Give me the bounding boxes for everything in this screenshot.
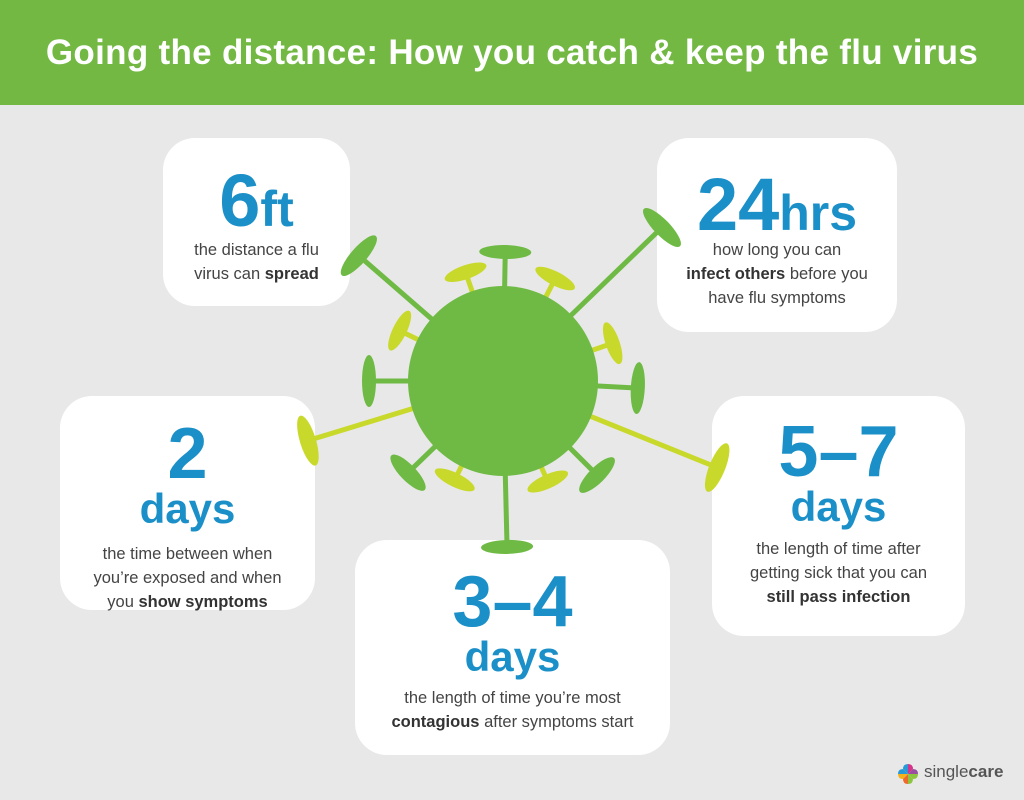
stat: 24hrs: 24hrs <box>697 163 857 246</box>
unit: days: days <box>791 483 886 530</box>
icon: logo mark <box>898 764 918 784</box>
text: 2 days <box>93 545 282 611</box>
text: 3-4 days: contagious after symptoms start <box>391 713 634 731</box>
card: 6ft <box>163 138 350 306</box>
text: 6ft: virus can spread <box>194 265 319 283</box>
text: 24hrs: how long you can <box>713 241 841 259</box>
unit: days: days <box>465 633 560 680</box>
unit: days: days <box>140 485 235 532</box>
logo text: singlecare <box>924 762 1003 781</box>
title: Going the distance: How you catch & keep the flu virus <box>46 33 978 72</box>
stat: 5-7: 5–7 <box>778 412 899 492</box>
text: 5-7 days: the length of time after <box>756 540 921 558</box>
text: 3-4 days: the length of time you’re most <box>404 689 621 707</box>
logo: singlecare <box>898 762 1003 784</box>
text: 6ft: the distance a flu <box>194 241 319 259</box>
text: 24hrs <box>686 241 868 307</box>
card: 5-7 days <box>712 396 965 636</box>
card: 3-4 days <box>355 540 670 755</box>
stat: 3-4: 3–4 <box>452 562 573 642</box>
title <box>0 0 1024 105</box>
text: 24hrs: have flu symptoms <box>708 289 846 307</box>
text: 6ft <box>194 241 319 283</box>
stat: 6ft: 6ft <box>219 159 294 242</box>
card: 24hrs <box>657 138 897 332</box>
text: 24hrs: infect others before you <box>686 265 868 283</box>
text: 2 days: you show symptoms <box>107 593 268 611</box>
text: 3-4 days <box>391 689 634 731</box>
stat: 2: 2 <box>167 414 208 494</box>
text: 5-7 days: still pass infection <box>767 588 910 606</box>
text: 5-7 days: getting sick that you can <box>750 564 927 582</box>
text: 2 days: the time between when <box>103 545 272 563</box>
text: 5-7 days <box>750 540 927 606</box>
text: 2 days: you’re exposed and when <box>93 569 282 587</box>
card: 2 days <box>60 396 315 610</box>
